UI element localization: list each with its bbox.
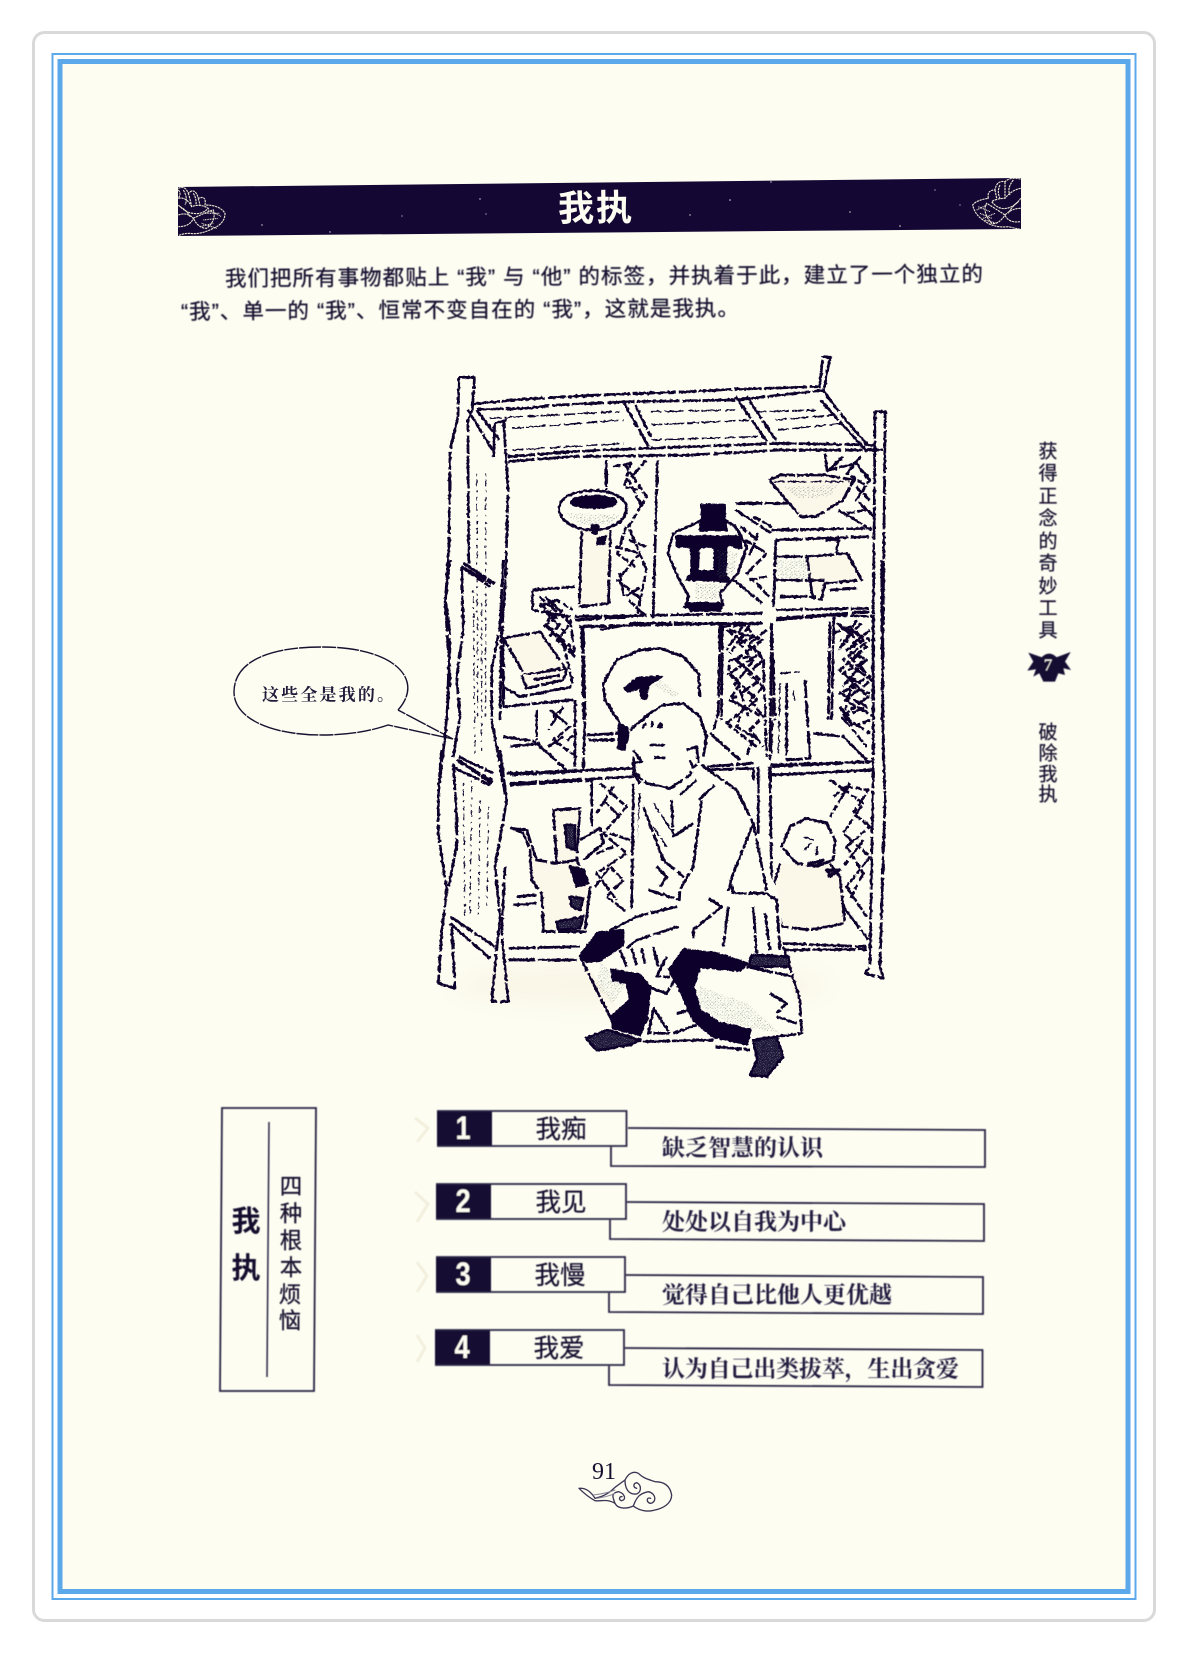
item 2: 处处以自我为中心 — [662, 1210, 849, 1234]
item 4 — [435, 1330, 982, 1387]
summary subheading: 根 — [280, 1228, 302, 1254]
item 2: 我见 — [535, 1189, 587, 1217]
summary subheading: 恼 — [279, 1308, 301, 1334]
summary subheading: 本 — [280, 1256, 302, 1280]
illustration: monk with cabinet — [438, 357, 885, 1077]
chapter number badge: 7 — [1044, 656, 1053, 674]
item 1: 缺乏智慧的认识 — [662, 1136, 825, 1160]
chapter title vertical — [1038, 440, 1058, 642]
left summary box — [220, 1108, 316, 1391]
summary subheading — [279, 1174, 302, 1334]
section title vertical: 我 — [1038, 764, 1058, 786]
banner bar — [178, 178, 1021, 236]
summary subheading: 四 — [280, 1174, 302, 1200]
chapter title vertical: 工 — [1038, 598, 1058, 620]
speech bubble text: 这些全是我的。 — [262, 686, 394, 704]
chapter title vertical: 奇 — [1038, 552, 1058, 574]
section title vertical: 执 — [1038, 784, 1058, 806]
summary heading — [231, 1205, 261, 1285]
chapter title vertical: 正 — [1038, 486, 1058, 508]
item 1: 1 — [455, 1111, 471, 1147]
intro paragraph: 我们把所有事物都贴上 “我” 与 “他” 的标签，并执着于此，建立了一个独立的 — [225, 262, 983, 291]
chapter title vertical: 妙 — [1038, 576, 1058, 598]
chapter side label — [1027, 440, 1071, 806]
right lotus ornament — [973, 178, 1021, 229]
chapter number badge — [1027, 652, 1071, 682]
chapter title vertical: 获 — [1038, 440, 1058, 462]
bowl on shelf — [769, 475, 854, 517]
banner speckles — [261, 181, 961, 233]
intro paragraph — [181, 262, 983, 324]
list of four afflictions — [415, 1111, 985, 1387]
middle cabinet structure with halo — [438, 560, 883, 793]
chapter title vertical: 的 — [1038, 530, 1058, 552]
item 4: 认为自己出类拔萃，生出贪爱 — [662, 1356, 959, 1382]
floor tint under illustration — [450, 963, 830, 1007]
section title vertical — [1038, 722, 1058, 806]
item 3: 我慢 — [534, 1262, 586, 1290]
black patterned vase — [668, 505, 747, 611]
lower cabinet and objects — [438, 733, 885, 1002]
section title vertical: 破 — [1038, 722, 1058, 744]
item 4: 我爱 — [533, 1335, 585, 1363]
monk figure with head and halo ribbon — [618, 703, 707, 790]
icon: cloud ornament — [579, 1472, 672, 1511]
item 3: 3 — [455, 1257, 471, 1293]
title banner — [178, 178, 1021, 236]
upper cabinet frame — [446, 357, 885, 720]
section title vertical: 除 — [1038, 742, 1058, 764]
page number: 91 — [592, 1459, 616, 1485]
item 2: 2 — [455, 1184, 471, 1220]
item 2 — [436, 1184, 984, 1241]
intro paragraph: “我”、单一的 “我”、恒常不变自在的 “我”，这就是我执。 — [181, 297, 739, 324]
chapter title vertical: 具 — [1038, 620, 1058, 642]
summary heading: 我 — [231, 1205, 261, 1238]
item 3: 觉得自己比他人更优越 — [662, 1282, 892, 1308]
banner title text: 我执 — [558, 187, 634, 229]
item 4: 4 — [454, 1330, 470, 1366]
speech bubble — [234, 647, 453, 739]
chapter title vertical: 得 — [1038, 462, 1058, 484]
summary heading: 执 — [231, 1252, 261, 1285]
left lotus ornament — [178, 187, 225, 236]
item 1: 我痴 — [535, 1116, 587, 1144]
pedestal vase on upper shelf — [559, 491, 626, 607]
summary subheading: 种 — [280, 1202, 302, 1226]
summary subheading: 烦 — [279, 1282, 301, 1308]
item 3 — [436, 1257, 983, 1314]
chapter title vertical: 念 — [1038, 506, 1058, 530]
item 1 — [437, 1111, 985, 1167]
faint chevrons — [415, 1118, 428, 1362]
monk body — [580, 757, 802, 1077]
